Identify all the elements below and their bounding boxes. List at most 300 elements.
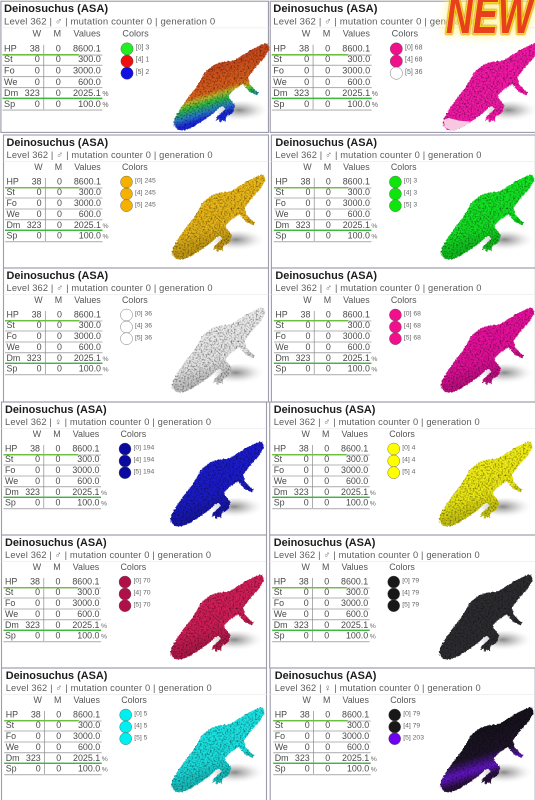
stats table: 600.0 <box>77 476 100 486</box>
stats table: We <box>275 209 289 219</box>
stats table: Colors <box>389 562 415 572</box>
stats table: 0 <box>326 364 331 374</box>
crocodile: black <box>439 574 535 660</box>
stats table: 38 <box>30 44 40 54</box>
stats table: 38 <box>301 310 310 320</box>
stats table: Fo <box>275 198 286 208</box>
stats table: Colors <box>122 162 148 172</box>
title: Deinosuchus (ASA) <box>4 3 108 15</box>
stats table: Values <box>343 162 370 172</box>
title: Deinosuchus (ASA) <box>6 270 109 282</box>
panel: card 1 rainbow <box>1 1 280 132</box>
panel: card 10 black <box>270 535 535 668</box>
stats table: W <box>33 429 42 439</box>
panel: card 11 cyan <box>2 668 275 800</box>
stats table: 100.0 <box>79 364 101 374</box>
color swatches: [0] 79 <box>403 711 420 718</box>
stats table: St <box>275 320 284 330</box>
stats table: 0 <box>325 88 330 98</box>
stats table: Sp <box>6 231 17 241</box>
stats table: W <box>33 562 42 572</box>
stats table: 3000.0 <box>342 65 370 75</box>
color swatches: [5] 36 <box>405 69 423 76</box>
stats table: 600.0 <box>348 342 370 352</box>
subtitle: Level 362 | ♂ | mutation counter 0 | generation 0 <box>6 150 212 160</box>
color swatches: [0] 68 <box>404 311 421 318</box>
stats table: Colors <box>120 429 147 439</box>
stats table: Values <box>73 562 100 572</box>
stats table: 0 <box>304 465 309 475</box>
stats table: % <box>372 91 378 98</box>
stats table: 8600.1 <box>343 177 370 187</box>
stats table: 2025.1 <box>341 620 368 630</box>
stats table: 0 <box>325 710 330 720</box>
stats table: 600.0 <box>78 77 101 87</box>
stats table: Fo <box>274 465 284 475</box>
stats table: 0 <box>35 631 40 641</box>
stats table: % <box>370 501 376 508</box>
stats table: M <box>55 295 62 305</box>
crocodile: gold <box>172 174 275 260</box>
subtitle: Level 362 | ♂ | mutation counter 0 | generation 0 <box>274 417 480 427</box>
stats table: M <box>323 695 330 705</box>
stats table: 0 <box>56 77 61 87</box>
stats table: 0 <box>56 753 61 763</box>
stats table: Fo <box>275 331 286 341</box>
stats table: 3000.0 <box>74 198 101 208</box>
stats table: % <box>102 756 108 763</box>
stats table: 0 <box>304 54 309 64</box>
panel: card 4 green <box>271 135 535 268</box>
crocodile: black and purple <box>440 707 535 792</box>
subtitle: Level 362 | ♂ | mutation counter 0 | generation 0 <box>273 16 484 27</box>
stats table: Fo <box>273 65 284 75</box>
stats table: 0 <box>56 487 61 497</box>
stats table: 2025.1 <box>343 220 370 230</box>
color swatches <box>120 709 148 745</box>
color swatches <box>388 576 419 612</box>
stats table: 2025.1 <box>72 487 100 497</box>
color swatches: [4] 68 <box>404 322 421 330</box>
stats table: 300.0 <box>78 54 101 64</box>
stats table: 0 <box>37 342 42 352</box>
stats table: Values <box>74 295 101 305</box>
stats table: 323 <box>296 220 310 230</box>
stats table: We <box>4 77 18 87</box>
stats table: 0 <box>304 609 309 619</box>
stats table: 0 <box>324 465 329 475</box>
stats table: 38 <box>301 177 310 187</box>
stats table: % <box>101 623 107 630</box>
stats table: St <box>6 720 15 730</box>
stats table: 0 <box>325 44 330 54</box>
stats table: 0 <box>305 342 310 352</box>
crocodile: cyan <box>171 707 275 792</box>
color swatches: [0] 5 <box>134 711 148 718</box>
stats table: 0 <box>324 577 329 587</box>
stats table: 0 <box>324 498 329 508</box>
title: Deinosuchus (ASA) <box>275 270 377 282</box>
stats table: 300.0 <box>77 454 100 464</box>
stats table: Colors <box>121 695 147 705</box>
stats table: 0 <box>324 620 329 630</box>
color swatches: [4] 4 <box>402 456 416 464</box>
stats table: Dm <box>6 753 20 763</box>
color swatches: [5] 3 <box>404 202 417 208</box>
stats table: W <box>302 29 311 39</box>
stats table: 0 <box>324 487 329 497</box>
stats table: 0 <box>56 465 61 475</box>
stats table: M <box>324 295 331 305</box>
stats table: Values <box>74 162 101 172</box>
stats table: % <box>371 367 377 374</box>
panel: card 3 gold <box>4 135 275 268</box>
stats table: 100.0 <box>348 364 370 374</box>
stats table: St <box>6 320 15 330</box>
stats table: 0 <box>56 731 61 741</box>
stats table: HP <box>5 577 17 587</box>
stats table: 0 <box>324 631 329 641</box>
stats table: 0 <box>56 764 61 774</box>
stats table: 0 <box>305 198 310 208</box>
color swatches: [4] 79 <box>403 722 420 730</box>
stats table: St <box>273 54 282 64</box>
stats table: 323 <box>27 353 42 363</box>
stats table: 0 <box>36 742 41 752</box>
stats table: 38 <box>299 577 309 587</box>
stats table: 8600.1 <box>342 710 369 720</box>
color swatches: [4] 194 <box>134 456 155 464</box>
stats table: 0 <box>57 187 62 197</box>
stats table: Sp <box>274 498 285 508</box>
stats table: % <box>101 634 107 641</box>
stats table: St <box>274 587 283 597</box>
stats table: 0 <box>56 631 61 641</box>
stats table: W <box>302 562 311 572</box>
stats table: Fo <box>6 331 17 341</box>
stats table: 3000.0 <box>343 331 370 341</box>
stats table: 0 <box>305 742 310 752</box>
color swatches: [0] 70 <box>134 578 151 585</box>
stats table: 0 <box>324 476 329 486</box>
subtitle: Level 362 | ♂ | mutation counter 0 | generation 0 <box>6 683 212 693</box>
panel: card 6 magenta <box>271 268 535 402</box>
stats table: 0 <box>56 620 61 630</box>
stats table: 38 <box>30 444 40 454</box>
stats table: 3000.0 <box>341 598 368 608</box>
color swatches: [4] 70 <box>134 590 151 596</box>
stats table: 0 <box>304 99 309 109</box>
stats table: Dm <box>274 487 288 497</box>
stats table: Colors <box>391 295 417 305</box>
stats table: 2025.1 <box>74 220 101 230</box>
stats table <box>271 294 535 375</box>
stats table: 100.0 <box>347 764 369 774</box>
stats table: 600.0 <box>79 209 101 219</box>
stats table: Sp <box>5 631 16 641</box>
stats table: Sp <box>273 99 284 109</box>
stats table: 600.0 <box>346 476 368 486</box>
stats table: 0 <box>325 77 330 87</box>
stats table: Dm <box>4 88 18 98</box>
card border <box>4 135 268 268</box>
stats table: 0 <box>326 342 331 352</box>
stats table: 0 <box>56 444 61 454</box>
stats table <box>4 294 268 375</box>
stats table: M <box>53 562 61 572</box>
color swatches: [4] 79 <box>402 590 419 596</box>
title: Deinosuchus (ASA) <box>273 3 378 15</box>
stats table: Colors <box>120 562 147 572</box>
stats table: Sp <box>6 364 17 374</box>
color swatches <box>389 309 421 345</box>
stats table: 0 <box>304 598 309 608</box>
stats table: % <box>370 623 376 630</box>
card border <box>270 535 535 668</box>
stats table: 600.0 <box>348 209 370 219</box>
stats table: 300.0 <box>346 454 368 464</box>
stats table: 0 <box>305 209 310 219</box>
stats table: Dm <box>6 353 20 363</box>
stats table: Dm <box>275 220 289 230</box>
stats table: 0 <box>57 353 62 363</box>
stats table: 0 <box>326 209 331 219</box>
stats table: 100.0 <box>347 99 370 109</box>
color swatches: [0] 3 <box>404 178 417 185</box>
card border <box>271 135 535 268</box>
stats table: Sp <box>6 764 17 774</box>
stats table: 0 <box>56 99 61 109</box>
title: Deinosuchus (ASA) <box>6 137 109 149</box>
stats table: St <box>274 454 283 464</box>
card border <box>1 1 268 132</box>
stats table: 0 <box>324 598 329 608</box>
stats table: 3000.0 <box>73 731 100 741</box>
panel: card 2 magenta and white <box>270 1 535 132</box>
card border <box>270 1 535 132</box>
color swatches: [0] 79 <box>402 578 419 585</box>
stats table: W <box>32 29 41 39</box>
stats table: 300.0 <box>78 720 100 730</box>
stats table: Fo <box>6 198 17 208</box>
stats table: 0 <box>35 587 40 597</box>
card border <box>2 535 266 668</box>
stats table: Colors <box>391 162 417 172</box>
stats table: 0 <box>56 476 61 486</box>
stats table: 0 <box>305 720 310 730</box>
stats table: 100.0 <box>78 764 100 774</box>
stats table: % <box>371 767 377 774</box>
stats table <box>2 562 266 642</box>
stats table <box>4 162 268 242</box>
stats table: 2025.1 <box>342 88 370 98</box>
stats table: 0 <box>326 320 331 330</box>
stats table: HP <box>6 310 19 320</box>
stats table: 0 <box>326 198 331 208</box>
stats table: M <box>53 429 61 439</box>
panel: card 8 yellow <box>270 402 535 535</box>
stats table: W <box>302 429 311 439</box>
stats table: HP <box>274 444 286 454</box>
stats table: W <box>34 162 43 172</box>
subtitle: Level 362 | ♂ | mutation counter 0 | generation 0 <box>5 550 211 560</box>
stats table: 323 <box>27 220 42 230</box>
stats table: 3000.0 <box>343 198 370 208</box>
stats table: 0 <box>57 198 62 208</box>
color swatches: [4] 245 <box>135 190 156 196</box>
title: Deinosuchus (ASA) <box>274 404 376 416</box>
stats table: M <box>322 429 329 439</box>
title: Deinosuchus (ASA) <box>275 670 377 682</box>
stats table: 0 <box>304 65 309 75</box>
stats table: HP <box>274 577 286 587</box>
stats table: % <box>371 356 377 363</box>
crocodile: crimson <box>171 574 274 660</box>
stats table: 0 <box>56 44 61 54</box>
stats table: Values <box>73 695 100 705</box>
stats table: We <box>6 342 20 352</box>
stats table: Sp <box>275 764 286 774</box>
panel: card 12 black and purple <box>270 668 535 800</box>
stats table: 38 <box>299 444 309 454</box>
stats table: 0 <box>56 54 61 64</box>
color swatches <box>388 443 416 479</box>
stats table: 323 <box>25 487 40 497</box>
color swatches <box>120 309 152 345</box>
stats table: 2025.1 <box>343 353 370 363</box>
stats table: 38 <box>30 577 40 587</box>
subtitle: Level 362 | ♂ | mutation counter 0 | generation 0 <box>6 283 212 293</box>
stats table: % <box>371 234 377 241</box>
stats table: 0 <box>35 498 40 508</box>
stats table: 100.0 <box>77 631 100 641</box>
stats table: 0 <box>325 720 330 730</box>
stats table: M <box>323 29 330 39</box>
stats table: 0 <box>57 209 62 219</box>
card border <box>271 268 535 402</box>
stats table: 0 <box>305 764 310 774</box>
stats table: 323 <box>296 353 310 363</box>
stats table: 3000.0 <box>342 731 369 741</box>
stats table: 0 <box>56 598 61 608</box>
stats table: 100.0 <box>78 99 101 109</box>
stats table: % <box>101 490 107 497</box>
stats table: Fo <box>4 65 15 75</box>
stats table: 0 <box>326 177 331 187</box>
stats table: % <box>102 367 109 374</box>
stats table: 0 <box>326 310 331 320</box>
stats table: 0 <box>57 220 62 230</box>
stats table: 8600.1 <box>74 310 101 320</box>
stats table: % <box>371 756 377 763</box>
stats table: We <box>5 609 18 619</box>
card border <box>270 668 535 800</box>
stats table: 0 <box>305 731 310 741</box>
stats table: 0 <box>326 353 331 363</box>
stats table: 2025.1 <box>341 487 368 497</box>
stats table: 8600.1 <box>73 44 101 54</box>
stats table: 0 <box>37 231 42 241</box>
stats table <box>270 428 535 509</box>
stats table: 2025.1 <box>73 753 100 763</box>
stats table: Values <box>341 562 368 572</box>
stats table: 3000.0 <box>74 331 101 341</box>
stats table: Fo <box>6 731 16 741</box>
crocodile: white <box>172 307 275 393</box>
stats table: 0 <box>57 331 62 341</box>
subtitle: Level 362 | ♂ | mutation counter 0 | generation 0 <box>274 550 480 560</box>
stats table: 38 <box>32 177 42 187</box>
color swatches: [5] 68 <box>404 334 421 342</box>
stats table: % <box>101 501 107 508</box>
stats table: 0 <box>35 54 40 64</box>
stats table: HP <box>6 710 18 720</box>
stats table: 0 <box>56 710 61 720</box>
stats table: M <box>54 695 61 705</box>
stats table: 8600.1 <box>341 444 368 454</box>
stats table: 38 <box>300 710 310 720</box>
stats table <box>1 28 268 110</box>
stats table: 3000.0 <box>341 465 368 475</box>
color swatches: [4] 36 <box>135 322 152 330</box>
color swatches: [4] 3 <box>404 190 417 196</box>
stats table: 300.0 <box>79 187 101 197</box>
stats table: 0 <box>56 577 61 587</box>
stats table: St <box>275 187 284 197</box>
stats table: 600.0 <box>77 609 100 619</box>
stats table: % <box>102 102 109 109</box>
stats table <box>271 162 535 242</box>
stats table: 100.0 <box>346 631 368 641</box>
title: Deinosuchus (ASA) <box>274 537 376 549</box>
stats table: 323 <box>295 753 310 763</box>
stats table: We <box>6 742 19 752</box>
stats table: 0 <box>36 731 41 741</box>
stats table: 600.0 <box>347 77 370 87</box>
stats table: 300.0 <box>347 54 370 64</box>
color swatches: [5] 194 <box>134 468 155 476</box>
stats table: 0 <box>56 720 61 730</box>
stats table: Colors <box>390 695 416 705</box>
stats table: 0 <box>56 742 61 752</box>
stats table: 0 <box>56 65 61 75</box>
stats table: 0 <box>56 454 61 464</box>
stats table: 100.0 <box>77 498 100 508</box>
stats table: 100.0 <box>346 498 368 508</box>
stats table: Fo <box>275 731 285 741</box>
stats table: 300.0 <box>347 720 369 730</box>
stats table: 8600.1 <box>341 577 368 587</box>
stats table: 8600.1 <box>342 44 370 54</box>
stats table: Fo <box>5 465 15 475</box>
crocodile: green <box>441 174 535 260</box>
stats table: 0 <box>304 587 309 597</box>
stats table: 0 <box>35 476 40 486</box>
stats table: 0 <box>35 99 40 109</box>
stats table: 323 <box>26 753 41 763</box>
stats table <box>270 28 535 110</box>
stats table: 0 <box>304 476 309 486</box>
color swatches <box>389 709 424 745</box>
stats table: HP <box>4 44 17 54</box>
stats table: % <box>102 234 109 241</box>
color swatches: [5] 2 <box>136 69 149 76</box>
stats table: 38 <box>299 44 309 54</box>
stats table: % <box>102 356 109 363</box>
color swatches: [4] 68 <box>405 57 423 64</box>
stats table: 0 <box>35 454 40 464</box>
stats table: 8600.1 <box>72 577 100 587</box>
